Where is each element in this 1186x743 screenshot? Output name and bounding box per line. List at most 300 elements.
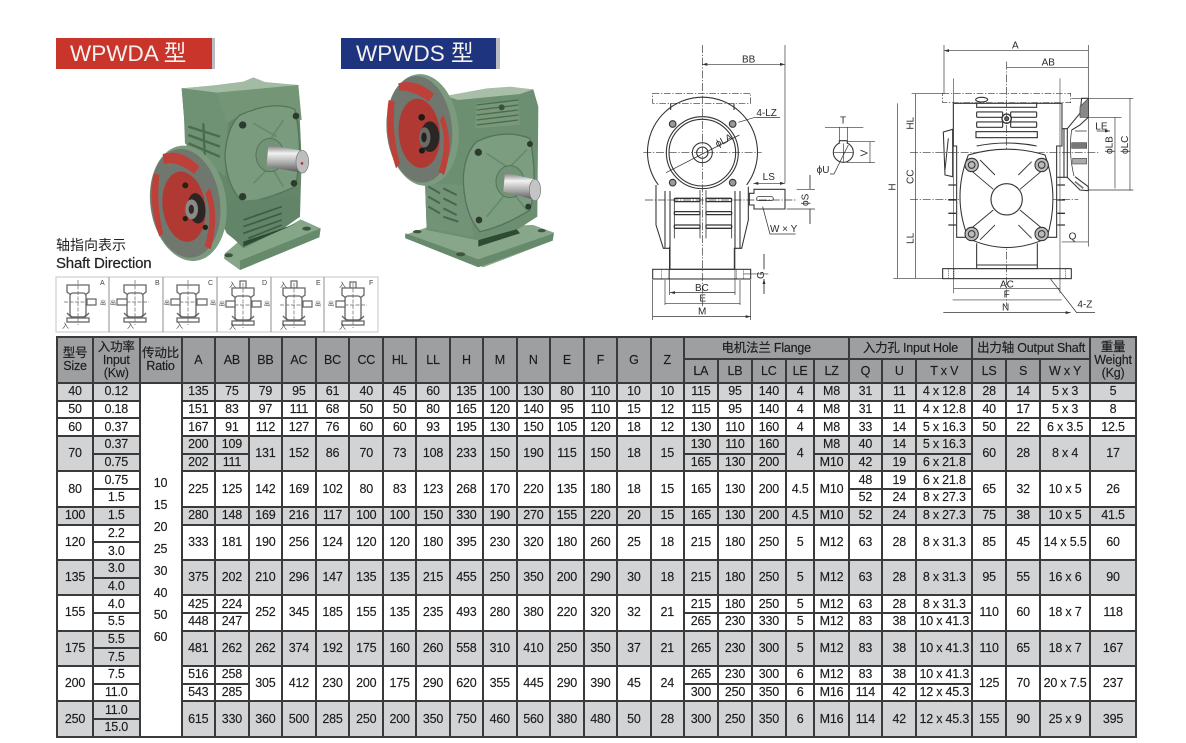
row: size 250 first line: 560 xyxy=(523,712,543,726)
icon: direction C: 入 xyxy=(176,322,183,330)
row: size 40: 60 xyxy=(426,384,440,398)
row: size 50: 4 xyxy=(797,402,803,416)
dimension drawing: front view: AC xyxy=(1000,279,1014,290)
row: size 175 first line: 374 xyxy=(289,641,309,655)
dimension drawing: front view: H xyxy=(888,183,899,191)
row: size 135 first line: 210 xyxy=(255,570,276,584)
row: size 250 first line: 90 xyxy=(1016,712,1030,726)
row: size 70 second line: 165 xyxy=(691,455,711,469)
row: size 135 first line: 5 xyxy=(797,570,803,584)
row: size 80 first line xyxy=(68,473,1120,496)
row: size 100: 220 xyxy=(590,508,610,522)
row: size 200 first line: 516 xyxy=(188,667,208,681)
dimension drawing: side view: BC xyxy=(695,283,709,294)
row: size 155 first line: 250 xyxy=(759,597,779,611)
table header: Weight xyxy=(1094,352,1132,366)
row: size 40: 100 xyxy=(490,384,510,398)
table header: S xyxy=(1019,364,1027,378)
row: size 50: 15 xyxy=(627,402,641,416)
table header: AC xyxy=(290,352,307,366)
row: size 175 first line: 230 xyxy=(725,641,745,655)
row: size 100: 52 xyxy=(859,508,872,522)
caption: shaft direction English: Shaft Direction xyxy=(56,255,151,272)
row: size 135 first line: 63 xyxy=(859,570,872,584)
table header: 出力轴 Output Shaft xyxy=(977,340,1085,354)
icon: direction B: B xyxy=(155,280,160,287)
row: size 60: 22 xyxy=(1016,420,1030,434)
row: size 135 second line: 4.0 xyxy=(108,579,125,593)
row: size 120 first line: 230 xyxy=(490,535,510,549)
row: size 40: 31 xyxy=(859,384,872,398)
row: size 155 first line: 493 xyxy=(456,605,477,619)
row: size 70 first line: 4 xyxy=(797,446,803,460)
icon: direction B xyxy=(110,280,160,330)
row: size 50: 80 xyxy=(426,402,440,416)
row: size 135 first line: 180 xyxy=(725,570,745,584)
row: size 120 first line: 180 xyxy=(725,535,745,549)
row: size 60: 160 xyxy=(759,420,779,434)
row: size 200 first line: 83 xyxy=(859,667,872,681)
row: size 135 first line: 147 xyxy=(322,570,343,584)
row: size 135 first line: 455 xyxy=(456,570,477,584)
row: size 155 first line: 18 x 7 xyxy=(1049,605,1082,619)
row: size 80 first line: 200 xyxy=(759,482,779,496)
row: size 200 second line: 12 x 45.3 xyxy=(919,685,969,699)
row: size 175 first line: 38 xyxy=(893,641,906,655)
row: size 60: 76 xyxy=(326,420,339,434)
row: size 200 first line: 70 xyxy=(1016,676,1030,690)
row: size 80 first line: 130 xyxy=(725,482,745,496)
table body: 40 xyxy=(154,586,167,600)
row: size 155 first line: 110 xyxy=(979,605,999,619)
row: size 60: 0.37 xyxy=(104,420,128,434)
row: size 100: 169 xyxy=(255,508,276,522)
row: size 70 second line: 130 xyxy=(725,455,745,469)
row: size 135 first line: 250 xyxy=(490,570,510,584)
row: size 175 first line: 250 xyxy=(557,641,577,655)
row: size 250 first line: 28 xyxy=(660,712,674,726)
dimension drawing: side view: E xyxy=(699,293,706,304)
row: size 155 second line: M12 xyxy=(820,614,843,628)
row: size 60: 5 x 16.3 xyxy=(923,420,966,434)
row: size 40: 40 xyxy=(68,384,82,398)
row: size 70 first line: 152 xyxy=(289,446,309,460)
table header: 入力孔 Input Hole xyxy=(863,340,958,354)
row: size 155 first line: 320 xyxy=(590,605,610,619)
icon: direction B: 出 xyxy=(110,299,116,307)
row: size 60: 127 xyxy=(289,420,309,434)
row: size 135 first line: 200 xyxy=(557,570,577,584)
row: size 120 first line: 181 xyxy=(222,535,242,549)
row: size 80 first line: 123 xyxy=(423,482,443,496)
row: size 155 first line: 28 xyxy=(893,597,906,611)
row: size 40: 5 x 3 xyxy=(1052,384,1078,398)
row: size 50: 83 xyxy=(225,402,239,416)
banner: WPWDA xyxy=(56,38,215,69)
row: size 40: 11 xyxy=(893,384,906,398)
row: size 60: 60 xyxy=(68,420,82,434)
row: size 100: 41.5 xyxy=(1101,508,1125,522)
row: size 50: 12 xyxy=(660,402,674,416)
row: size 250 first line xyxy=(58,702,1135,736)
dimension drawing: front view: CC xyxy=(906,170,917,184)
dimension drawing: front view: F xyxy=(1004,290,1010,301)
row: size 175 first line: 350 xyxy=(590,641,610,655)
row: size 40: 61 xyxy=(326,384,339,398)
photo: WPWDA gearbox xyxy=(143,77,321,270)
row: size 100: 216 xyxy=(289,508,309,522)
row: size 100: 4.5 xyxy=(792,508,808,522)
row: size 175 first line: 481 xyxy=(188,641,208,655)
row: size 175 first line: 18 x 7 xyxy=(1049,641,1082,655)
row: size 80 second line: 1.5 xyxy=(108,490,125,504)
row: size 155 first line: 380 xyxy=(523,605,543,619)
row: size 80 first line: 32 xyxy=(1016,482,1030,496)
row: size 100: 148 xyxy=(222,508,242,522)
row: size 80 first line: 80 xyxy=(68,482,82,496)
row: size 200 second line: 285 xyxy=(222,685,242,699)
row: size 70 first line: 86 xyxy=(326,446,339,460)
row: size 70 first line: 60 xyxy=(982,446,996,460)
row: size 250 first line: 25 x 9 xyxy=(1049,712,1082,726)
caption: shaft direction Chinese: 轴指向表示 xyxy=(56,237,126,253)
row: size 70 first line: 200 xyxy=(188,437,208,451)
row: size 70 first line: 160 xyxy=(759,437,779,451)
row: size 200 first line: 390 xyxy=(590,676,610,690)
row: size 70 first line: 17 xyxy=(1106,446,1120,460)
row: size 200 first line: 445 xyxy=(523,676,543,690)
table header: Q xyxy=(861,364,870,378)
row: size 60: 33 xyxy=(859,420,872,434)
row: size 135 first line: 55 xyxy=(1016,570,1030,584)
row: size 175 first line: 5 xyxy=(797,641,803,655)
table header: LE xyxy=(793,364,808,378)
dimension drawing: side view: T xyxy=(840,116,846,127)
table body: 20 xyxy=(154,520,167,534)
row: size 155 first line: 32 xyxy=(627,605,641,619)
icon: direction A xyxy=(62,280,106,330)
row: size 100: M10 xyxy=(820,508,843,522)
row: size 175 first line: 10 x 41.3 xyxy=(919,641,969,655)
icon: direction E: 出 xyxy=(315,300,321,308)
table header: 重量 xyxy=(1101,340,1125,354)
row: size 250 first line: 114 xyxy=(856,712,875,726)
row: size 40: 28 xyxy=(982,384,996,398)
row: size 135 first line: M12 xyxy=(820,570,843,584)
row: size 200 second line: 350 xyxy=(759,685,779,699)
row: size 80 first line: 180 xyxy=(590,482,610,496)
row: size 80 second line: 52 xyxy=(859,490,872,504)
icon: direction D: 入 xyxy=(229,323,236,331)
row: size 40: 95 xyxy=(292,384,306,398)
row: size 175 first line: 410 xyxy=(523,641,543,655)
row: size 100: 330 xyxy=(456,508,477,522)
row: size 175 first line: 558 xyxy=(456,641,477,655)
row: size 80 first line: 18 xyxy=(627,482,641,496)
row: size 135 first line: 202 xyxy=(222,570,242,584)
row: size 250 first line: 50 xyxy=(627,712,641,726)
table header: M xyxy=(495,352,505,366)
icon: direction F xyxy=(328,280,373,331)
row: size 120 first line: 320 xyxy=(523,535,543,549)
row: size 155 first line xyxy=(65,597,1123,619)
row: size 50: 95 xyxy=(728,402,742,416)
banner: WPWDS xyxy=(341,38,500,69)
icon: direction D: 入 xyxy=(229,281,236,289)
row: size 70 first line: 108 xyxy=(423,446,443,460)
dimension drawing: side view xyxy=(643,45,875,320)
table header: 型号 xyxy=(63,346,87,360)
row: size 120 first line: 260 xyxy=(590,535,610,549)
row: size 135 first line: 250 xyxy=(759,570,779,584)
table header: F xyxy=(597,352,604,366)
row: size 250 first line: 360 xyxy=(255,712,276,726)
row: size 155 first line: 21 xyxy=(660,605,674,619)
icon: direction C: 出 xyxy=(164,299,170,307)
row: size 175 first line: 21 xyxy=(660,641,674,655)
row: size 50: M8 xyxy=(823,402,840,416)
row: size 135 first line: 135 xyxy=(65,570,85,584)
icon: direction D: 出 xyxy=(264,300,270,308)
table header: LL xyxy=(426,352,440,366)
row: size 50: 111 xyxy=(290,402,308,416)
row: size 175 first line: 5.5 xyxy=(108,632,125,646)
row: size 120 first line: 120 xyxy=(356,535,376,549)
row: size 250 first line: 11.0 xyxy=(105,703,128,717)
row: size 80 first line: 19 xyxy=(893,473,906,487)
row: size 50: 8 xyxy=(1110,402,1116,416)
row: size 80 first line: 220 xyxy=(523,482,543,496)
row: size 120 first line: 395 xyxy=(456,535,477,549)
row: size 200 first line: 305 xyxy=(255,676,276,690)
icon: direction E: 入 xyxy=(280,323,287,331)
icon: direction C: C xyxy=(208,280,213,287)
table header: LC xyxy=(761,364,777,378)
row: size 50: 5 x 3 xyxy=(1052,402,1078,416)
row: size 100: 165 xyxy=(691,508,711,522)
row: size 155 first line: 252 xyxy=(255,605,276,619)
row: size 175 first line: 260 xyxy=(423,641,443,655)
row: size 100: 150 xyxy=(423,508,443,522)
row: size 40: 79 xyxy=(259,384,272,398)
row: size 175 first line: 300 xyxy=(759,641,779,655)
row: size 120 first line: 333 xyxy=(188,535,208,549)
row: size 120 first line: 25 xyxy=(627,535,641,549)
shaft direction strip xyxy=(56,277,378,332)
row: size 135 first line: 95 xyxy=(982,570,996,584)
row: size 40: 14 xyxy=(1016,384,1030,398)
icon: direction A: A xyxy=(100,280,105,287)
row: size 120 first line: 120 xyxy=(65,535,85,549)
table header: A xyxy=(194,352,202,366)
dimension drawing: front view: N xyxy=(1002,303,1009,314)
row: size 155 first line: M12 xyxy=(820,597,843,611)
row: size 120 second line: 3.0 xyxy=(108,544,125,558)
row: size 155 first line: 5 xyxy=(797,597,803,611)
row: size 175 first line: 310 xyxy=(490,641,510,655)
dimension drawing: side view: W × Y xyxy=(770,224,798,235)
row: size 120 first line: 256 xyxy=(289,535,309,549)
row: size 200 first line: 237 xyxy=(1103,676,1123,690)
row: size 50: 110 xyxy=(591,402,610,416)
row: size 120 first line: 5 xyxy=(797,535,803,549)
row: size 135 first line: 215 xyxy=(691,570,711,584)
row: size 250 first line: 330 xyxy=(222,712,242,726)
table body: 50 xyxy=(154,608,167,622)
row: size 80 first line: 65 xyxy=(982,482,996,496)
dimension drawing: front view: HL xyxy=(906,116,917,130)
row: size 120 first line: 250 xyxy=(759,535,779,549)
row: size 200 first line: 200 xyxy=(356,676,376,690)
row: size 250 first line: 42 xyxy=(893,712,906,726)
row: size 155 first line: 4.0 xyxy=(108,597,125,611)
row: size 60: 4 xyxy=(797,420,803,434)
row: size 40: 45 xyxy=(393,384,406,398)
row: size 155 first line: 8 x 31.3 xyxy=(923,597,966,611)
dimension drawing: side view: ϕS xyxy=(800,193,811,206)
row: size 175 first line: 175 xyxy=(356,641,376,655)
row: size 50: 97 xyxy=(259,402,272,416)
table body xyxy=(58,384,1135,736)
icon: direction B: 入 xyxy=(127,322,134,330)
row: size 80 second line: 24 xyxy=(893,490,906,504)
row: size 100: 130 xyxy=(725,508,745,522)
row: size 155 second line: 330 xyxy=(759,614,779,628)
row: size 120 first line: 63 xyxy=(859,535,872,549)
table header: LA xyxy=(693,364,708,378)
row: size 60: 130 xyxy=(490,420,510,434)
row: size 175 first line: 83 xyxy=(859,641,872,655)
row: size 250 first line: 200 xyxy=(389,712,410,726)
dimension drawing: front view xyxy=(888,40,1133,314)
row: size 40 xyxy=(58,384,1135,644)
row: size 120 first line: 215 xyxy=(691,535,711,549)
row: size 70 first line: 115 xyxy=(557,446,577,460)
row: size 200 second line: 42 xyxy=(893,685,906,699)
row: size 175 first line: 160 xyxy=(389,641,410,655)
row: size 120 first line xyxy=(65,526,1120,549)
row: size 70 first line: 73 xyxy=(393,446,406,460)
row: size 120 first line: 14 x 5.5 xyxy=(1044,535,1087,549)
table header: N xyxy=(529,352,538,366)
row: size 70 second line: 202 xyxy=(188,455,208,469)
row: size 120 first line: 60 xyxy=(1106,535,1120,549)
row: size 120 first line: 120 xyxy=(389,535,410,549)
table header: BB xyxy=(257,352,274,366)
row: size 70 first line: 15 xyxy=(660,446,674,460)
row: size 135 first line xyxy=(58,561,1135,594)
dimension drawing: front view: 4-Z xyxy=(1077,300,1092,311)
row: size 50: 140 xyxy=(759,402,779,416)
icon: direction D xyxy=(219,280,270,331)
dimension drawing: front view: LE xyxy=(1095,122,1108,133)
row: size 175 first line: 65 xyxy=(1016,641,1030,655)
row: size 120 first line: 45 xyxy=(1016,535,1030,549)
row: size 70 second line: M10 xyxy=(820,455,843,469)
row: size 135 first line: 30 xyxy=(627,570,641,584)
row: size 200 first line: 290 xyxy=(423,676,443,690)
row: size 120 first line: 28 xyxy=(893,535,906,549)
row: size 50 xyxy=(68,402,1116,416)
table header: Size xyxy=(63,359,87,373)
row: size 250 first line: 250 xyxy=(65,712,85,726)
row: size 155 first line: 155 xyxy=(356,605,376,619)
row: size 155 first line: 220 xyxy=(557,605,577,619)
row: size 155 second line: 83 xyxy=(859,614,872,628)
row: size 120 first line: 180 xyxy=(423,535,443,549)
row: size 100 xyxy=(58,508,1135,524)
row: size 70 first line: 190 xyxy=(523,446,543,460)
row: size 155 first line: 180 xyxy=(725,597,745,611)
row: size 200 second line: 11.0 xyxy=(105,685,128,699)
row: size 80 first line: 169 xyxy=(289,482,309,496)
row: size 175 first line: 37 xyxy=(627,641,641,655)
row: size 40: 75 xyxy=(225,384,239,398)
row: size 175 first line: 175 xyxy=(65,641,85,655)
row: size 60: 12.5 xyxy=(1101,420,1125,434)
row: size 200 first line: 125 xyxy=(979,676,999,690)
row: size 70 first line: 131 xyxy=(255,446,276,460)
row: size 200 first line: 10 x 41.3 xyxy=(919,667,969,681)
row: size 175 first line: 167 xyxy=(1103,641,1123,655)
row: size 80 first line: M10 xyxy=(820,482,843,496)
row: size 175 first line: M12 xyxy=(820,641,843,655)
row: size 200 first line: 38 xyxy=(893,667,906,681)
row: size 155 second line: 230 xyxy=(725,614,745,628)
row: size 200 second line: 300 xyxy=(691,685,711,699)
row: size 70 first line: 8 x 4 xyxy=(1052,446,1078,460)
row: size 70 first line: 150 xyxy=(590,446,610,460)
row: size 155 first line: 118 xyxy=(1103,605,1123,619)
table header: U xyxy=(895,364,904,378)
row: size 155 second line: 10 x 41.3 xyxy=(919,614,969,628)
row: size 175 first line: 110 xyxy=(979,641,999,655)
row: size 135 first line: 3.0 xyxy=(108,561,125,575)
row: size 80 first line: 4.5 xyxy=(792,482,808,496)
row: size 50: 17 xyxy=(1016,402,1030,416)
row: size 100: 24 xyxy=(893,508,906,522)
row: size 100: 100 xyxy=(65,508,85,522)
row: size 155 second line: 265 xyxy=(691,614,711,628)
row: size 50: 4 x 12.8 xyxy=(923,402,966,416)
row: size 155 first line: 215 xyxy=(691,597,711,611)
row: size 120 first line: 190 xyxy=(255,535,276,549)
row: size 40: 5 xyxy=(1110,384,1116,398)
row: size 155 second line xyxy=(108,614,969,628)
table header: (Kg) xyxy=(1102,366,1124,380)
row: size 50: 50 xyxy=(360,402,373,416)
row: size 80 first line: 15 xyxy=(660,482,674,496)
row: size 70 first line: 18 xyxy=(627,446,641,460)
dimension drawing: front view: Q xyxy=(1069,232,1077,243)
table header: 入功率 xyxy=(98,340,135,354)
row: size 100: 117 xyxy=(323,508,342,522)
row: size 175 first line xyxy=(58,632,1135,665)
row: size 155 second line: 5 xyxy=(797,614,803,628)
row: size 250 first line: 460 xyxy=(490,712,510,726)
row: size 135 first line: 375 xyxy=(188,570,208,584)
row: size 100: 155 xyxy=(557,508,577,522)
table header: E xyxy=(563,352,571,366)
icon: direction A: 入 xyxy=(62,322,69,330)
row: size 70 first line: 233 xyxy=(456,446,477,460)
row: size 50: 115 xyxy=(691,402,711,416)
row: size 175 second line: 7.5 xyxy=(108,650,125,664)
row: size 70 second line: 111 xyxy=(223,455,241,469)
row: size 200 first line: 620 xyxy=(456,676,477,690)
row: size 155 first line: 155 xyxy=(65,605,85,619)
row: size 200 first line: M12 xyxy=(820,667,843,681)
